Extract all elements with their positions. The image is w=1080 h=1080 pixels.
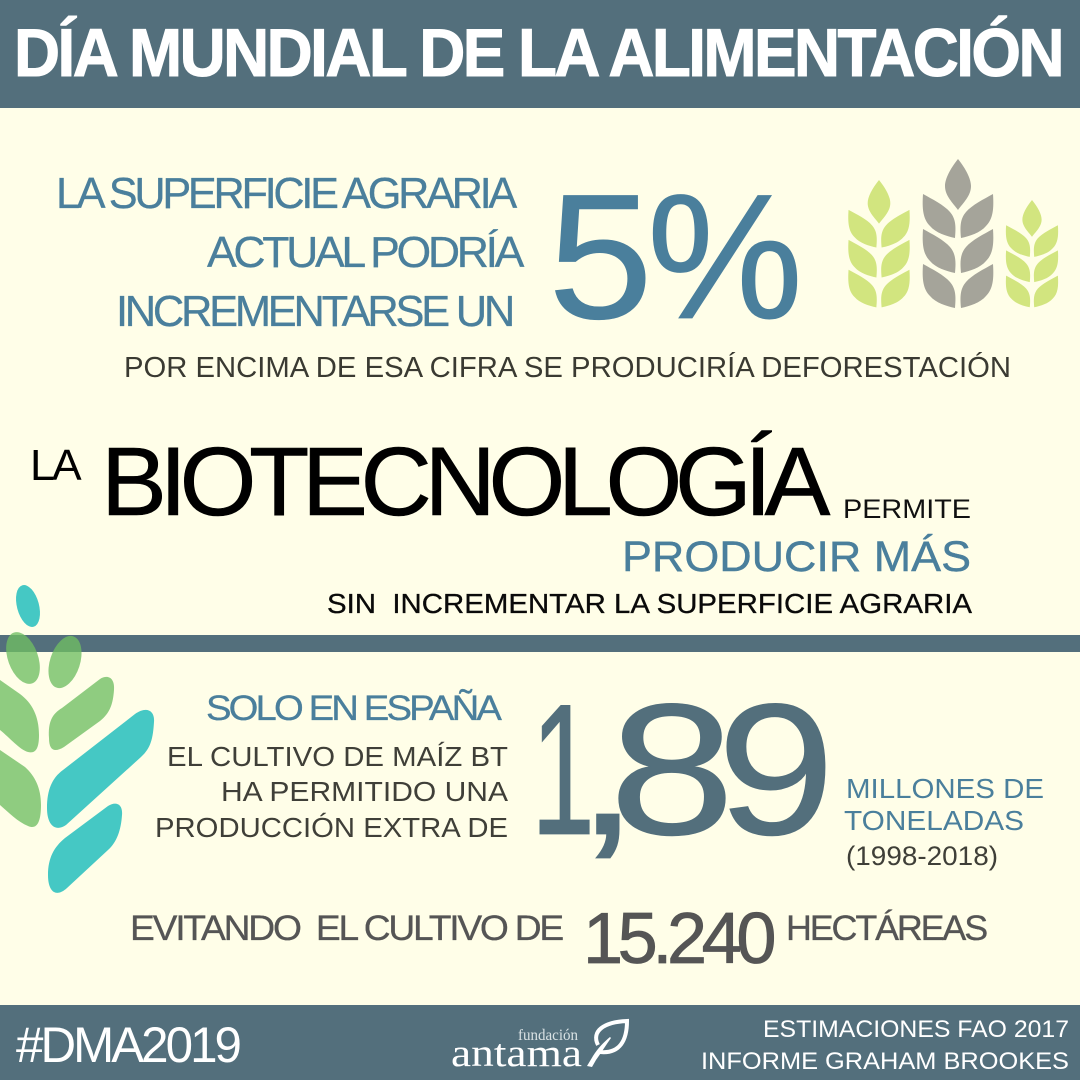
big number: 5% (548, 157, 803, 356)
text: la: LA (30, 441, 82, 490)
big number: 1,89: 1 (531, 665, 595, 874)
divider band (0, 635, 1080, 652)
heading: superficie agraria: LA SUPERFICIE AGRARIA (56, 169, 518, 218)
text: permite: PERMITE (843, 494, 971, 524)
credits: INFORME GRAHAM BROOKES (701, 1048, 1069, 1075)
heading: superficie agraria: ACTUAL PODRÍA (207, 228, 525, 277)
number: 15.240: 15.240 (583, 899, 774, 979)
text: millones de toneladas: (1998-2018) (846, 841, 998, 871)
header band (0, 0, 1080, 108)
panel: superficie agraria (56, 157, 1058, 384)
subtext: deforestación: POR ENCIMA DE ESA CIFRA SE PRODUCIRÍA DEFORESTACIÓN (124, 351, 1011, 384)
credits: ESTIMACIONES FAO 2017 (763, 1016, 1069, 1043)
text: cultivo de maíz bt (155, 741, 508, 843)
big number: 5%: 5 (548, 157, 653, 356)
hashtag: #DMA2019 (16, 1017, 240, 1073)
big number: 1,89: 9 (717, 665, 835, 874)
logo: fundación antama: antama (451, 1032, 582, 1075)
text: millones de toneladas (844, 773, 1044, 871)
heading: superficie agraria: INCREMENTARSE UN (116, 287, 513, 336)
heading: superficie agraria (56, 169, 525, 336)
text: evitando el cultivo de: EVITANDO EL CULTIVO DE (130, 909, 563, 948)
text: millones de toneladas: MILLONES DE (846, 773, 1044, 804)
text: cultivo de maíz bt: PRODUCCIÓN EXTRA DE (155, 812, 508, 843)
panel: biotecnología (30, 427, 972, 619)
icon: plant sprig (0, 582, 154, 893)
text: hectáreas: HECTÁREAS (786, 909, 987, 948)
heading: biotecnología: BIOTECNOLOGÍA (101, 427, 831, 536)
text: producir más: PRODUCIR MÁS (622, 533, 971, 581)
text: sin incrementar: SIN INCREMENTAR LA SUPERFICIE AGRARIA (327, 588, 972, 619)
big number: 1,89: 8 (609, 665, 735, 874)
big number: 5%: % (647, 157, 803, 356)
logo: fundación antama (451, 1021, 627, 1075)
panel: españa (130, 665, 1044, 979)
text: cultivo de maíz bt: EL CULTIVO DE MAÍZ BT (167, 741, 508, 772)
icon: wheat trio (848, 159, 1058, 308)
credits (701, 1016, 1069, 1075)
logo: fundación antama: fundación (518, 1027, 578, 1044)
text: cultivo de maíz bt: HA PERMITIDO UNA (221, 776, 508, 807)
heading: solo en españa: SOLO EN ESPAÑA (206, 689, 503, 728)
big number: 1,89: , (575, 665, 640, 874)
footer band (0, 1005, 1080, 1080)
big number: 1,89 (531, 665, 835, 874)
text: millones de toneladas: TONELADAS (844, 805, 1024, 836)
